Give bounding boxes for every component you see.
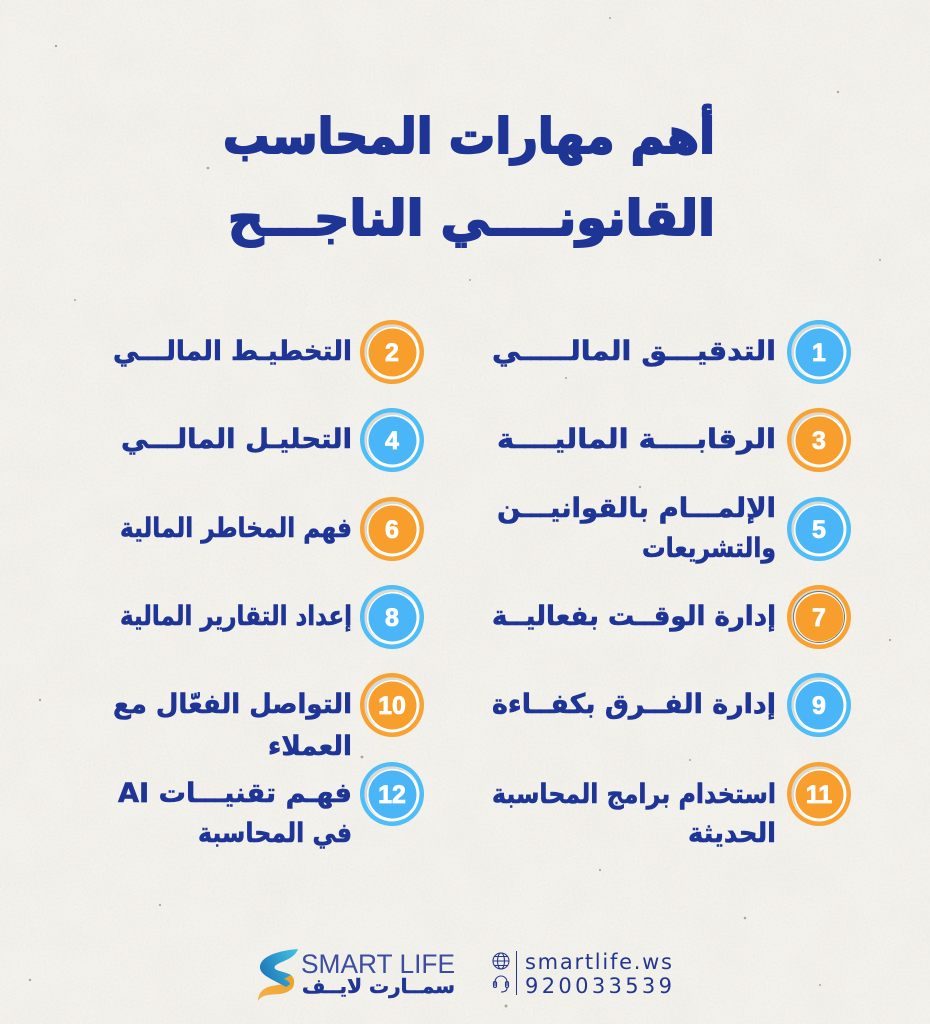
icon: headset	[494, 976, 508, 992]
skill 5: 5	[812, 516, 826, 544]
skill 8	[120, 585, 424, 649]
skill 3: 3	[812, 427, 826, 455]
skill 7: 7	[812, 604, 826, 632]
skill 6: فهم المخاطر المالية	[120, 513, 352, 544]
skill 7: إدارة الوقــت بفعاليــة	[492, 601, 776, 632]
skill 4: التحليـل المالـــي	[121, 424, 352, 455]
skill 10: 10	[378, 692, 406, 720]
skill 4: 4	[385, 427, 399, 455]
skill 12: 12	[378, 781, 406, 809]
title: القانونــــي الناجـــح	[228, 190, 715, 247]
contact details: smartlife.ws	[525, 950, 672, 974]
skill 10	[113, 673, 424, 762]
skill 7	[492, 585, 851, 649]
skill 3: الرقابــــة الماليــــة	[497, 424, 776, 455]
skill 9	[492, 673, 851, 737]
skill 1	[492, 320, 851, 384]
skill 12	[118, 762, 424, 849]
skill 9: 9	[812, 692, 826, 720]
skill 12: فهـم تقنيـــات AI	[118, 778, 352, 809]
title: أهم مهارات المحاسب	[223, 104, 715, 165]
skill 8: 8	[385, 604, 399, 632]
title	[223, 104, 715, 247]
skill 3	[497, 408, 851, 472]
skill 5: الإلمـــام بالقوانيـــن	[497, 493, 776, 524]
skill 2: التخطيـط المالـــي	[113, 336, 352, 367]
logo: سمــارت لايــف	[302, 974, 455, 998]
skill 10: العملاء	[268, 731, 352, 762]
logo: SMART LIFE	[301, 949, 455, 979]
skill 1: التدقيـــق المالـــــي	[492, 336, 776, 367]
skill 1: 1	[812, 339, 826, 367]
logo	[258, 949, 455, 1001]
skill 10: التواصل الفعّال مع	[113, 689, 352, 720]
skill 8: إعداد التقارير المالية	[120, 601, 352, 632]
skill 12: في المحاسبة	[198, 818, 352, 849]
contact details	[493, 950, 672, 998]
skill 9: إدارة الفــرق بكفــاءة	[492, 689, 776, 720]
skill 4	[121, 408, 424, 472]
contact details: 920033539	[525, 974, 672, 998]
skill 2: 2	[385, 339, 399, 367]
skill 2	[113, 320, 424, 384]
skill 11: 11	[806, 781, 832, 809]
skill 11: استخدام برامج المحاسبة	[492, 779, 776, 810]
skill 6: 6	[385, 516, 399, 544]
icon: S swoosh	[258, 949, 298, 1001]
icon: globe	[493, 953, 509, 969]
skill 5: والتشريعات	[642, 533, 776, 564]
skill 11	[492, 762, 851, 849]
skill 11: الحديثة	[688, 818, 776, 849]
skill 5	[497, 493, 851, 564]
skill 6	[120, 497, 424, 561]
